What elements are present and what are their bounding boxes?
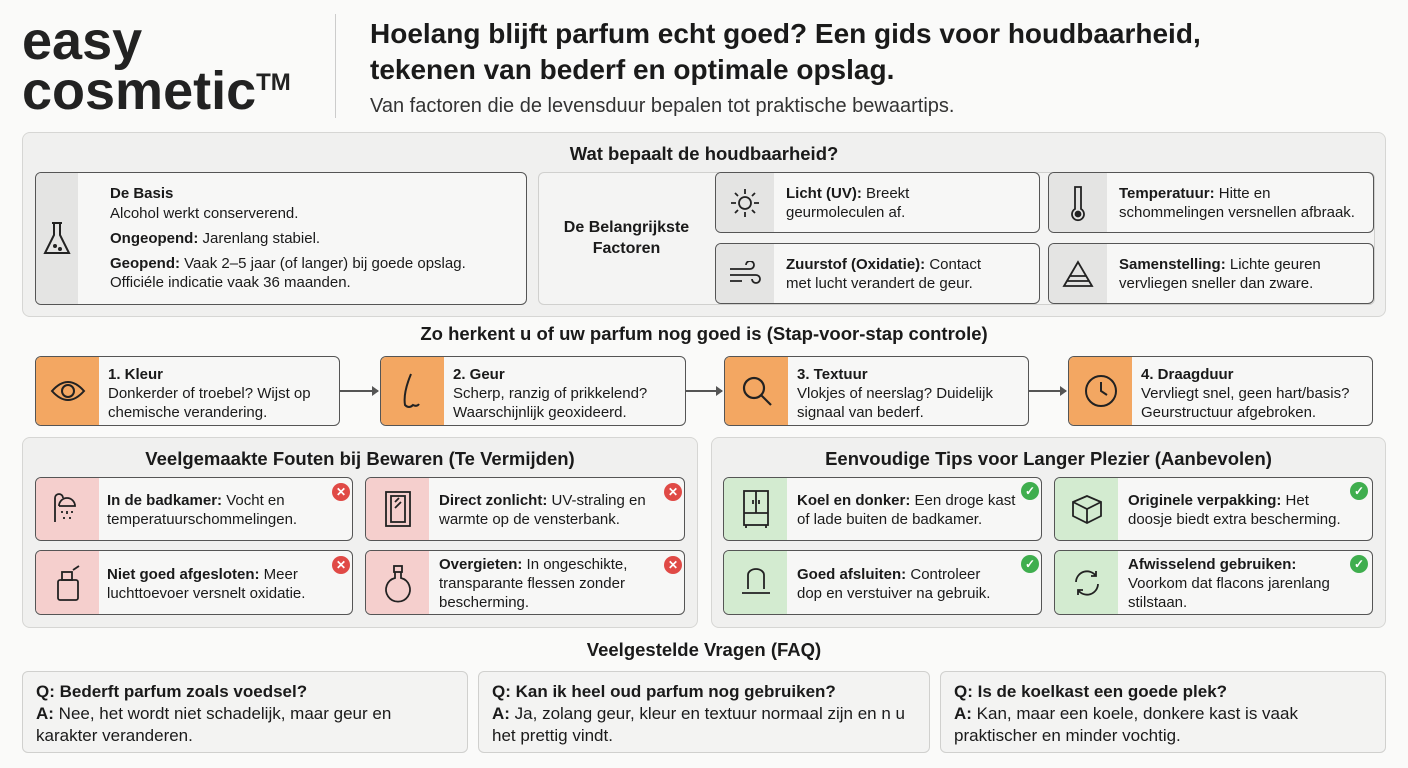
- panel: houdbaarheid: [22, 132, 1386, 317]
- step 1: chemische verandering.: [108, 404, 267, 421]
- mistake: overgieten: ✕: [668, 558, 678, 572]
- tip: afwisselend: stilstaan.: [1128, 594, 1187, 611]
- tip: verpakking: doosje biedt extra bescherming.: [1128, 511, 1341, 528]
- step 2: Waarschijnlijk geoxideerd.: [453, 404, 627, 421]
- faq 3: Q: Is de koelkast een goede plek?: [954, 682, 1227, 701]
- factor: temperatuur: [1048, 172, 1374, 233]
- factor: licht: Licht (UV): Breekt: [786, 185, 909, 202]
- factor: zuurstof: met lucht verandert de geur.: [786, 275, 973, 292]
- mistake: overgieten: transparante flessen zonder: [439, 575, 625, 592]
- heading: Wat bepaalt de houdbaarheid?: [570, 143, 838, 164]
- step 3: signaal van bederf.: [797, 404, 924, 421]
- panel: fouten: [22, 437, 698, 628]
- factors box: De Belangrijkste Factoren: [564, 219, 689, 257]
- arrow: [340, 390, 378, 392]
- logo: easy: [22, 11, 142, 71]
- factors box: [538, 172, 1375, 305]
- step 1: [35, 356, 340, 426]
- factor: temperatuur: Temperatuur: Hitte en: [1119, 185, 1270, 202]
- step 3: 3. Textuur: [797, 366, 868, 383]
- card: de basis: De Basis: [110, 185, 173, 202]
- step 1: 1. Kleur: [108, 366, 163, 383]
- tip: koel: of lade buiten de badkamer.: [797, 511, 982, 528]
- factor: zuurstof: [715, 243, 1040, 304]
- faq 1: Q: Bederft parfum zoals voedsel?: [36, 682, 307, 701]
- card: de basis: [35, 172, 527, 305]
- mistake: zonlicht: warmte op de vensterbank.: [439, 511, 620, 528]
- step 3: [724, 356, 1029, 426]
- factor: samenstelling: [1048, 243, 1374, 304]
- faq 2: A: Ja, zolang geur, kleur en textuur normaal zijn en n u het prettig vindt.: [492, 704, 905, 745]
- mistake: zonlicht: ✕: [668, 485, 678, 499]
- arrow: [686, 390, 722, 392]
- faq 2: [478, 671, 930, 753]
- step 1: Donkerder of troebel? Wijst op: [108, 385, 311, 402]
- step 4: 4. Draagduur: [1141, 366, 1234, 383]
- mistake: overgieten: Overgieten: In ongeschikte,: [439, 556, 627, 573]
- card: de basis: Ongeopend: Jarenlang stabiel.: [110, 230, 320, 247]
- tip: afwisselend: Afwisselend gebruiken:: [1128, 556, 1296, 573]
- tip: afsluiten: Goed afsluiten: Controleer: [797, 566, 980, 583]
- step 4: [1068, 356, 1373, 426]
- tip: afsluiten: ✓: [1025, 557, 1035, 571]
- panel: tips: [711, 437, 1386, 628]
- factor: zuurstof: Zuurstof (Oxidatie): Contact: [786, 256, 981, 273]
- subtitle: Van factoren die de levensduur bepalen tot praktische bewaartips.: [370, 95, 954, 117]
- mistake: badkamer: temperatuurschommelingen.: [107, 511, 297, 528]
- tip: koel: ✓: [1025, 484, 1035, 498]
- logo: [22, 11, 291, 121]
- step 2: Scherp, ranzig of prikkelend?: [453, 385, 647, 402]
- tip: verpakking: ✓: [1354, 484, 1364, 498]
- faq 2: Q: Kan ik heel oud parfum nog gebruiken?: [492, 682, 836, 701]
- factor: licht: geurmoleculen af.: [786, 204, 905, 221]
- title: tekenen van bederf en optimale opslag.: [370, 54, 894, 85]
- tip: koel: [723, 477, 1042, 541]
- tip: afwisselend: Voorkom dat flacons jarenlang: [1128, 575, 1330, 592]
- tip: afwisselend: ✓: [1354, 557, 1364, 571]
- step 4: Vervliegt snel, geen hart/basis?: [1141, 385, 1349, 402]
- factor: samenstelling: Samenstelling: Lichte geuren: [1119, 256, 1321, 273]
- tip: afwisselend: [1054, 550, 1373, 615]
- mistake: overgieten: [365, 550, 685, 615]
- step 2: [380, 356, 686, 426]
- mistake: zonlicht: Direct zonlicht: UV-straling en: [439, 492, 646, 509]
- faq 3: A: Kan, maar een koele, donkere kast is vaak praktischer en minder vochtig.: [954, 704, 1298, 745]
- factor: licht: [715, 172, 1040, 233]
- mistake: afgesloten: luchttoevoer versnelt oxidatie.: [107, 585, 305, 602]
- factor: samenstelling: vervliegen sneller dan zware.: [1119, 275, 1313, 292]
- tip: koel: Koel en donker: Een droge kast: [797, 492, 1015, 509]
- arrow: [1029, 390, 1066, 392]
- step 4: Geurstructuur afgebroken.: [1141, 404, 1316, 421]
- card: de basis: Geopend: Vaak 2–5 jaar (of langer) bij goede opslag. Officiéle indicatie vaak 36 maanden.: [110, 255, 466, 291]
- heading: Eenvoudige Tips voor Langer Plezier (Aanbevolen): [825, 448, 1272, 469]
- title: Hoelang blijft parfum echt goed? Een gids voor houdbaarheid,: [370, 18, 1201, 49]
- mistake: badkamer: ✕: [336, 485, 346, 499]
- faq 1: A: Nee, het wordt niet schadelijk, maar geur en karakter veranderen.: [36, 704, 391, 745]
- mistake: afgesloten: ✕: [336, 558, 346, 572]
- mistake: zonlicht: [365, 477, 685, 541]
- faq 3: [940, 671, 1386, 753]
- heading: stap-voor-stap: Zo herkent u of uw parfum nog goed is (Stap-voor-stap controle): [420, 323, 988, 344]
- mistake: overgieten: bescherming.: [439, 594, 529, 611]
- title: [370, 18, 1201, 85]
- mistake: badkamer: [35, 477, 353, 541]
- step 3: Vlokjes of neerslag? Duidelijk: [797, 385, 993, 402]
- tip: verpakking: Originele verpakking: Het: [1128, 492, 1309, 509]
- heading: Veelgemaakte Fouten bij Bewaren (Te Vermijden): [145, 448, 575, 469]
- faq 1: [22, 671, 468, 753]
- step 2: 2. Geur: [453, 366, 505, 383]
- factor: temperatuur: schommelingen versnellen afbraak.: [1119, 204, 1355, 221]
- mistake: afgesloten: [35, 550, 353, 615]
- mistake: badkamer: In de badkamer: Vocht en: [107, 492, 285, 509]
- mistake: afgesloten: Niet goed afgesloten: Meer: [107, 566, 298, 583]
- heading: FAQ: Veelgestelde Vragen (FAQ): [587, 639, 821, 660]
- tip: verpakking: [1054, 477, 1373, 541]
- logo: cosmeticTM: [22, 61, 291, 121]
- card: de basis: Alcohol werkt conserverend.: [110, 205, 298, 222]
- tip: afsluiten: [723, 550, 1042, 615]
- tip: afsluiten: dop en verstuiver na gebruik.: [797, 585, 990, 602]
